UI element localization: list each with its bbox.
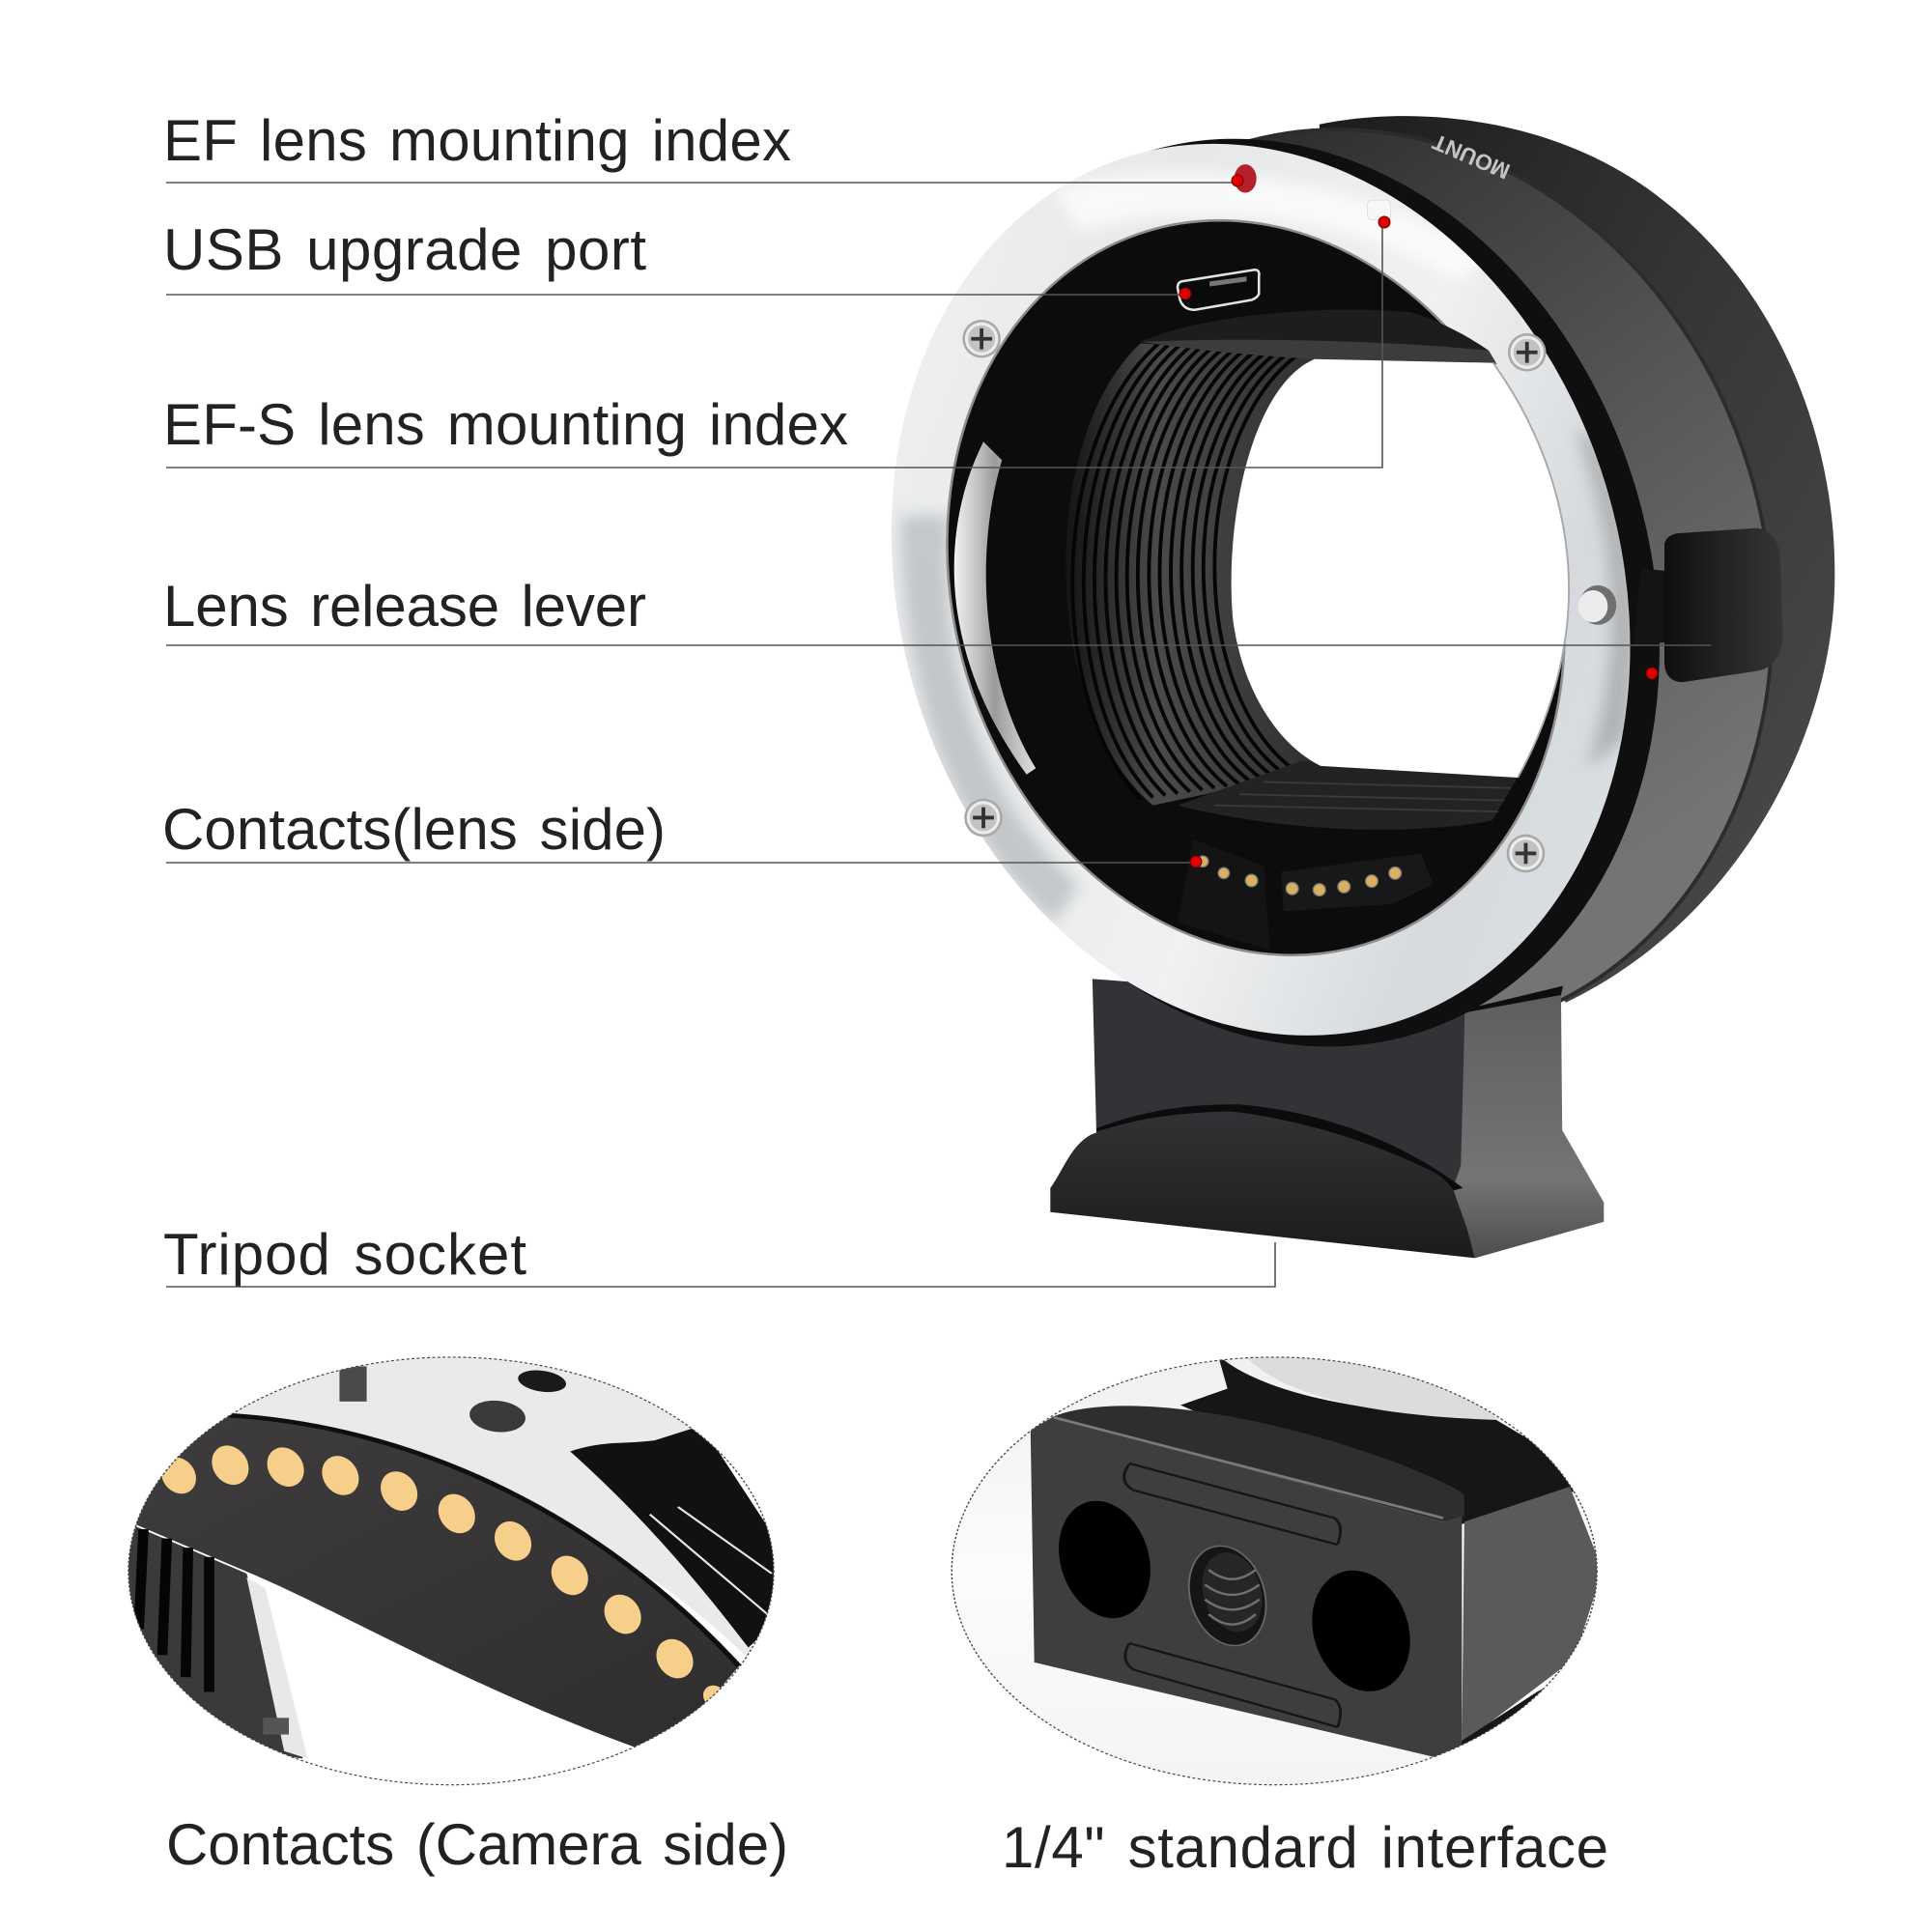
tripod base (1050, 979, 1604, 1258)
mount hole (469, 1401, 526, 1432)
silver strip (246, 1577, 307, 1758)
plate face (1031, 1416, 1462, 1758)
inner silver edge highlight (1493, 363, 1569, 778)
silver ring (783, 51, 1738, 1128)
slot bottom (1125, 1643, 1341, 1727)
inner dark cavity (858, 143, 1654, 1033)
label: USB upgrade port: USB upgrade port (163, 217, 646, 282)
detail image left (125, 1351, 777, 1758)
bottom ribbed floor (1178, 761, 1518, 830)
detail image right (946, 1355, 1603, 1788)
ring silver highlight (1246, 1355, 1499, 1420)
ring behind (1180, 1355, 1584, 1525)
release pin (1578, 585, 1616, 625)
label: EF-S lens mounting index: EF-S lens mounting index (163, 392, 848, 457)
adapter ring assembly (891, 135, 1783, 1047)
black rim (793, 43, 1770, 1142)
top shelf (1141, 340, 1496, 364)
contact plate (125, 1415, 739, 1747)
base side top shadow (1464, 986, 1563, 1012)
detail: camera side contacts (125, 1351, 777, 1785)
upper inner shading (1141, 309, 1489, 351)
plate side (1462, 1487, 1603, 1744)
contact block right (1281, 853, 1434, 911)
gold contacts (156, 1442, 729, 1710)
base side face (1451, 993, 1604, 1258)
base groove (1096, 1104, 1463, 1191)
white opening (1232, 359, 1569, 778)
plate highlight (1054, 1417, 1443, 1519)
dashed outline (128, 1357, 774, 1785)
ribs (125, 1521, 303, 1758)
black reflections (570, 1426, 777, 1648)
rib tunnel (1065, 343, 1325, 806)
EF index red pin (1235, 164, 1257, 193)
gold pins (1197, 856, 1402, 895)
slot top (1124, 1463, 1341, 1545)
mount slot (518, 1370, 566, 1393)
label: Contacts lens side: Contacts(lens side) (162, 797, 666, 862)
caption: Contacts (Camera side): Contacts (Camera side) (166, 1812, 788, 1877)
label: Tripod socket: Tripod socket (163, 1222, 526, 1287)
camera-side contacts (1178, 839, 1434, 951)
hole left (1059, 1501, 1151, 1619)
label: Lens release lever: Lens release lever (163, 574, 646, 639)
detail backdrop (983, 1358, 1523, 1785)
rib base (1065, 343, 1325, 806)
silver band (234, 1357, 753, 1657)
label: EF lens mounting index: EF lens mounting index (163, 108, 791, 173)
dashed outline (952, 1357, 1597, 1785)
EF-S index white mark (1368, 200, 1391, 220)
plate upper edge (228, 1415, 739, 1666)
small screw lower (263, 1718, 289, 1735)
threaded socket (1188, 1546, 1267, 1646)
detail: 1/4 inch interface (946, 1355, 1603, 1788)
bayonet lip (954, 441, 1036, 775)
product: lens mount adapter (166, 29, 1883, 1287)
MOUNT engraving: MOUNT (1429, 129, 1514, 185)
callout dots (1179, 175, 1658, 867)
lens release lever (1634, 528, 1783, 682)
USB contacts (1209, 276, 1246, 287)
ring reflections (900, 172, 1635, 923)
small screw (339, 1366, 367, 1402)
hole right (1312, 1571, 1410, 1691)
barrel sections (861, 29, 1883, 1138)
leader lines (166, 183, 1711, 1287)
rear barrel (1320, 116, 1834, 1003)
base foot (1050, 1112, 1475, 1258)
ribs (1072, 343, 1301, 799)
plate side dark edge (1460, 1687, 1546, 1747)
caption: 1/4 inch standard interface: 1/4" standard interface (1002, 1815, 1608, 1880)
screws (962, 320, 1547, 872)
plate top bevel (1054, 1406, 1464, 1521)
base upright body (1093, 979, 1464, 1191)
front barrel (861, 29, 1883, 1138)
USB port (1178, 270, 1259, 310)
contact block left (1178, 839, 1270, 951)
